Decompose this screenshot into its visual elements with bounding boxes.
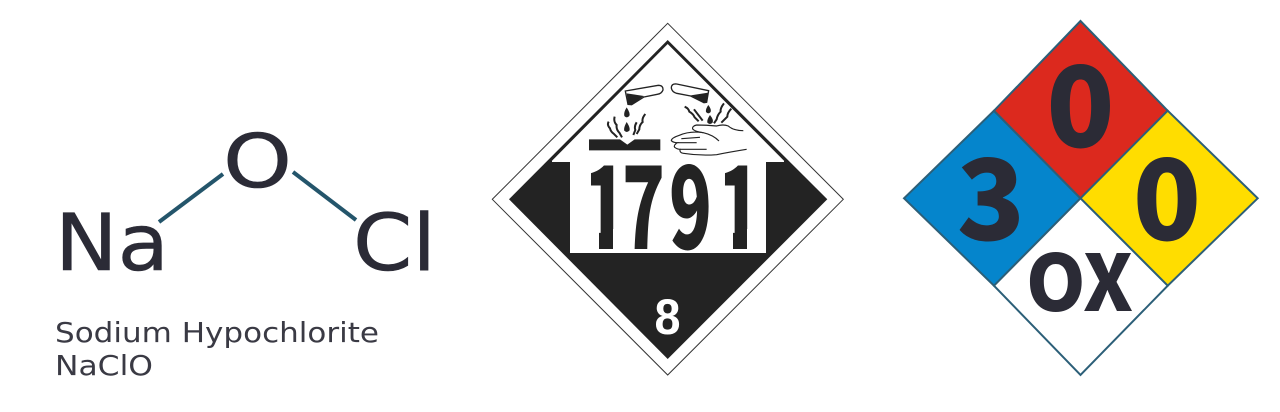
placard outer border	[492, 23, 843, 375]
flammability rating: 0	[1046, 18, 1115, 180]
panel: NFPA 704 diamond	[904, 18, 1258, 375]
right drops and fumes	[685, 103, 731, 124]
UN number panel	[570, 162, 766, 253]
white upper triangle	[552, 44, 784, 162]
panel: UN 1791 placard	[492, 23, 843, 375]
health quadrant: blue	[904, 111, 1080, 286]
atom: Na: Na	[55, 199, 169, 289]
special hazard: oxidizer: OX	[1026, 222, 1133, 334]
left test tube	[625, 85, 663, 105]
panel: molecular structure	[55, 119, 436, 382]
compound name: Sodium Hypochlorite	[55, 317, 379, 349]
NFPA ratings	[957, 18, 1201, 334]
atom: Cl: Cl	[353, 199, 436, 289]
right test tube	[671, 84, 709, 103]
compound formula: NaClO	[55, 350, 153, 382]
health rating: 3	[957, 111, 1025, 273]
corroded surface bar	[589, 139, 660, 150]
bond: Na to O	[159, 174, 223, 222]
flammability quadrant: red	[994, 21, 1168, 198]
UN number: 1791	[584, 119, 761, 281]
instability rating: 0	[1133, 111, 1201, 273]
hand	[671, 125, 747, 155]
bond: O to Cl	[293, 172, 356, 220]
special hazard quadrant: white	[994, 198, 1168, 375]
placard black diamond	[509, 40, 827, 359]
icon: corrosive symbol	[589, 84, 747, 155]
left drops and fumes	[608, 107, 645, 137]
atom: O: O	[223, 119, 292, 205]
instability quadrant: yellow	[1080, 111, 1258, 286]
hazard class number: 8	[654, 289, 680, 345]
